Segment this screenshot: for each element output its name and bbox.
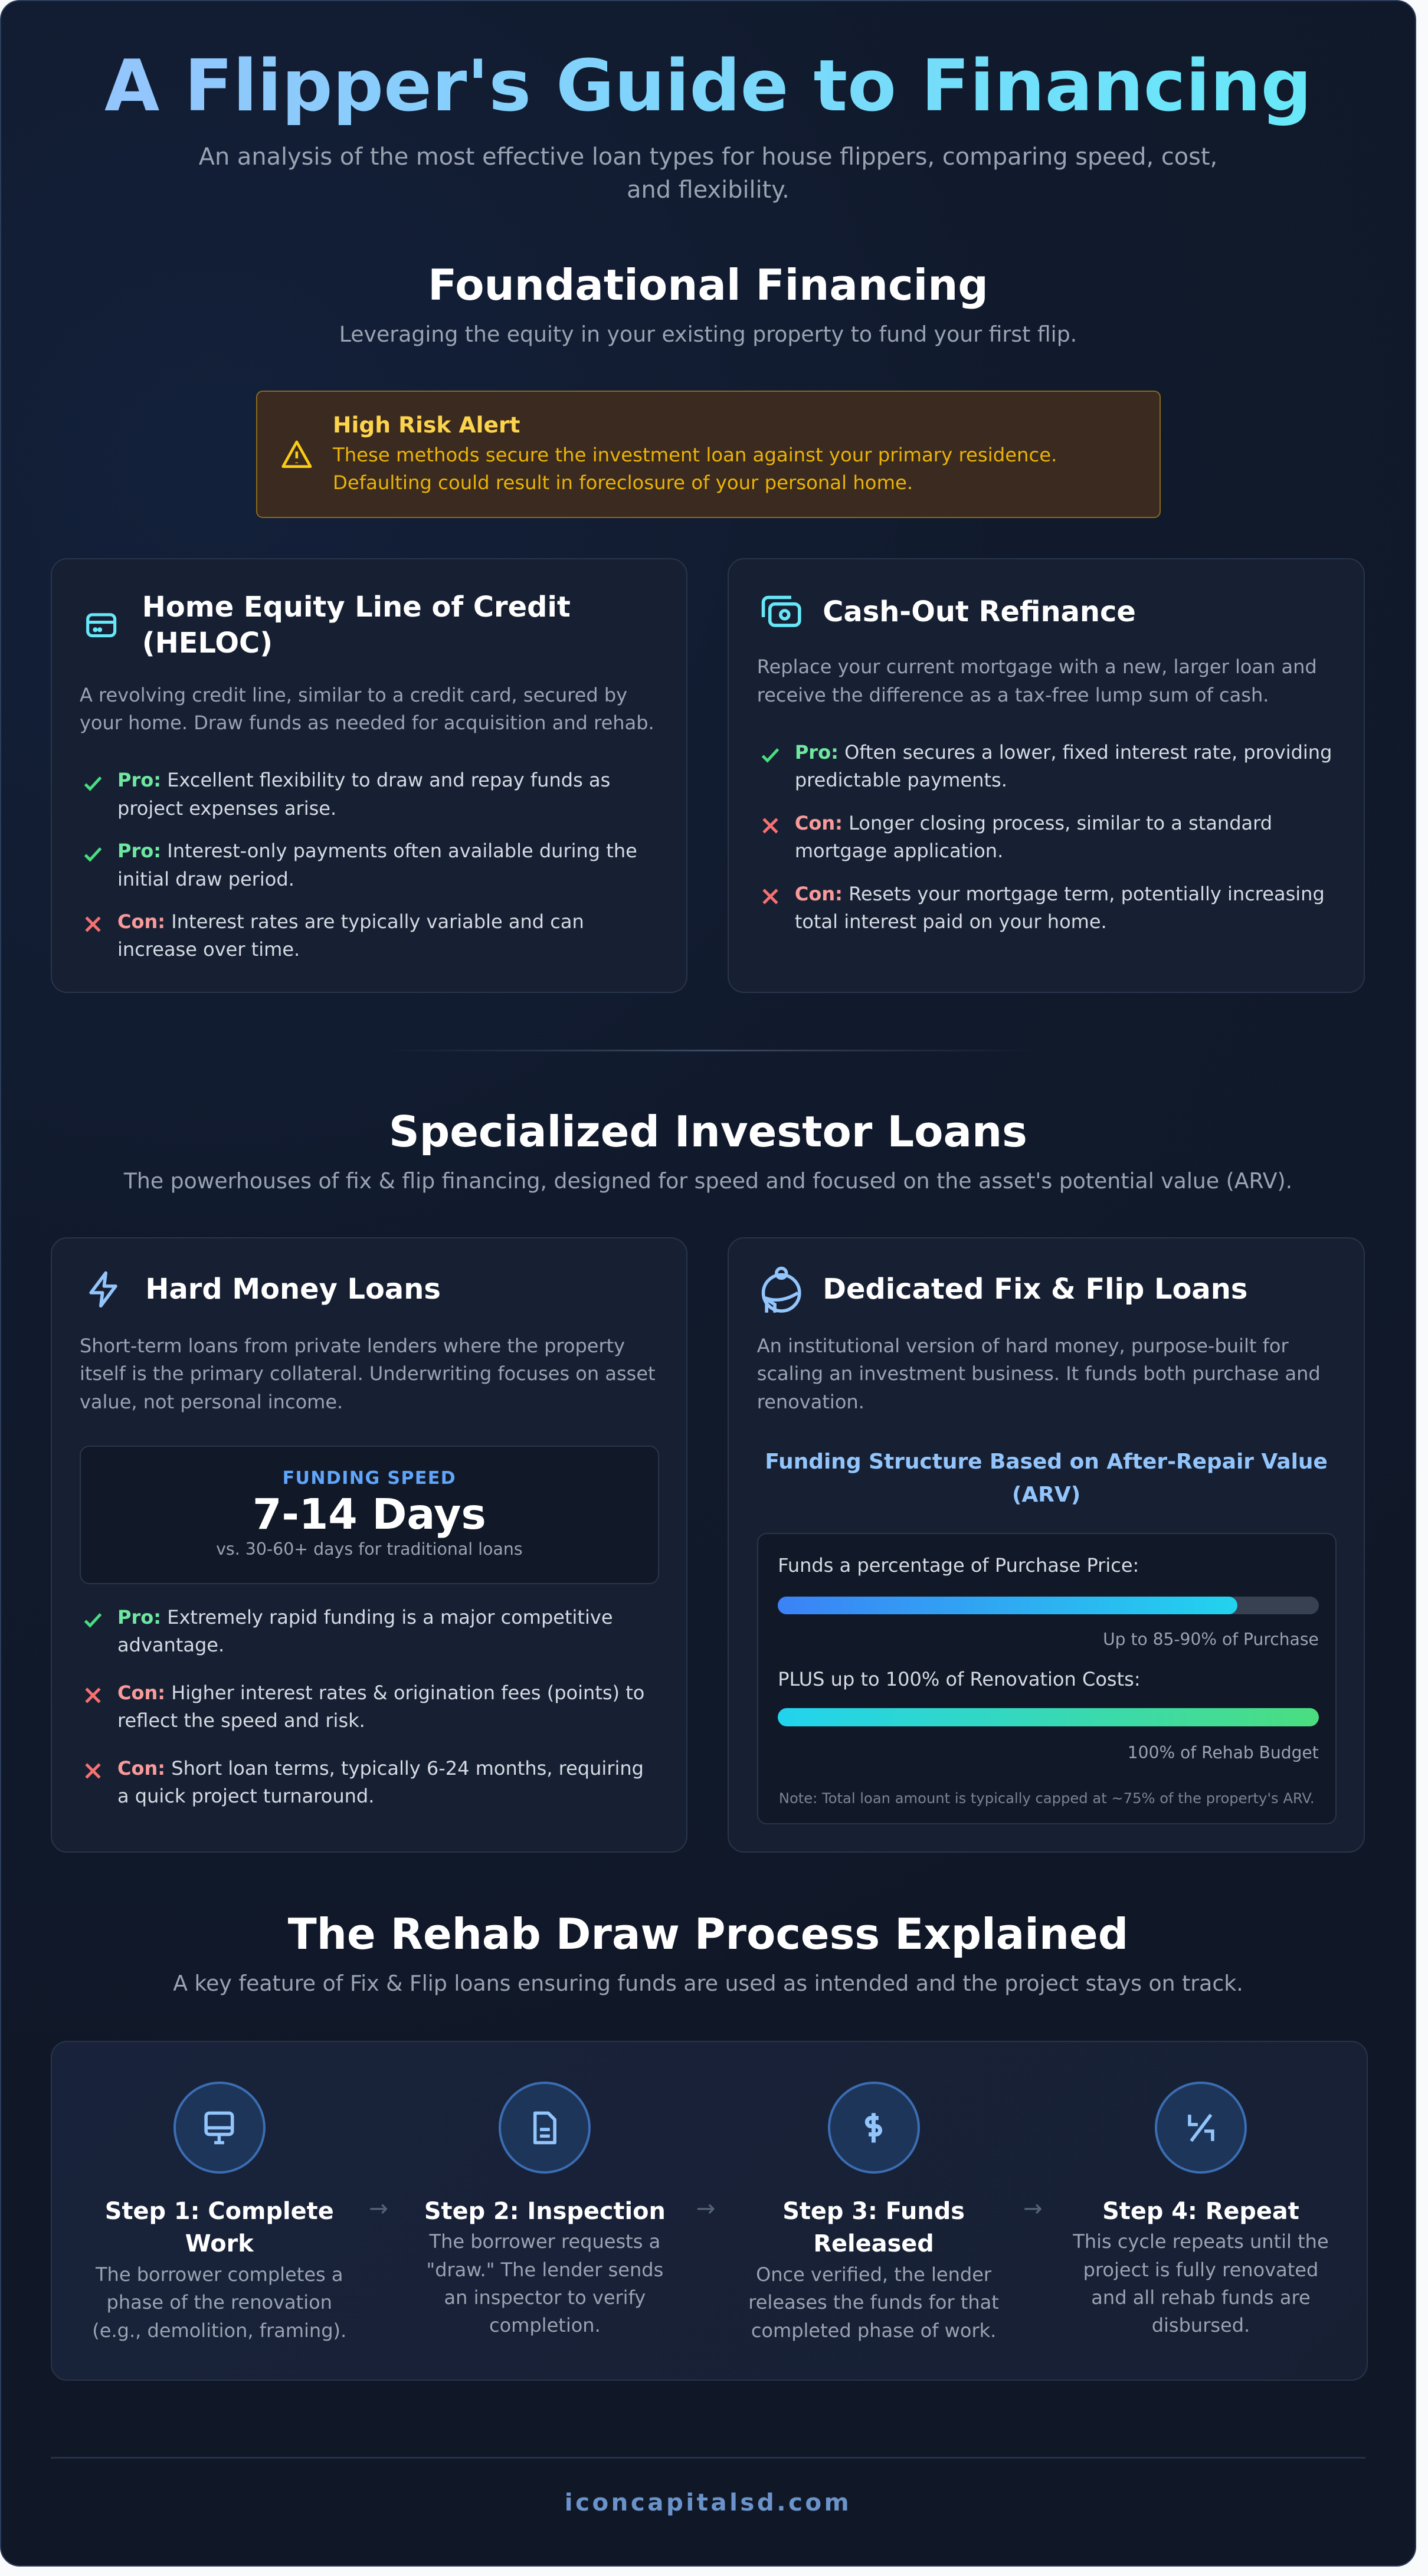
- panel: Dedicated Fix & Flip Loans: [728, 1237, 1365, 1853]
- step 4: Step 4: Repeat: [1102, 2197, 1299, 2224]
- funding speed box: 7-14 Days: [253, 1490, 486, 1539]
- title: A Flipper's Guide to Financing: [104, 45, 1312, 127]
- step 2: The borrower requests a "draw." The lender sends an inspector to verify completion.: [426, 2230, 663, 2336]
- title: Dedicated Fix & Flip Loans: [823, 1273, 1247, 1306]
- heading: Rehab Draw Process: The Rehab Draw Process Explained: [288, 1909, 1128, 1959]
- description: Replace your current mortgage with a new, larger loan and receive the difference as a tax-free lump sum of cash.: [757, 656, 1317, 706]
- icon: document: [499, 2082, 591, 2174]
- panel: process steps: [51, 2041, 1368, 2381]
- title: Home Equity Line of Credit (HELOC): [142, 591, 571, 660]
- funding speed box: [80, 1446, 659, 1584]
- section subtitle: The powerhouses of fix & flip financing, designed for speed and focused on the asset's potential value (ARV).: [124, 1168, 1292, 1194]
- pro 2: Pro: Interest-only payments often available during the initial draw period.: [117, 840, 637, 890]
- bar chart: funding structure: PLUS up to 100% of Renovation Costs:: [778, 1668, 1141, 1690]
- heading: Foundational Financing: Foundational Financing: [428, 260, 988, 310]
- alert text: These methods secure the investment loan against your primary residence. Defaulting could result in foreclosure of your personal home.: [333, 444, 1057, 494]
- bar: renovation: [778, 1708, 1319, 1726]
- panel: Hard Money Loans: [51, 1237, 687, 1853]
- alert text: [333, 412, 1057, 494]
- pro: Pro: Often secures a lower, fixed interest rate, providing predictable payments.: [795, 741, 1332, 791]
- step 4: [1061, 2082, 1341, 2361]
- pro 1: Pro: Excellent flexibility to draw and repay funds as project expenses arise.: [117, 769, 610, 820]
- step 2: Step 2: Inspection: [424, 2197, 666, 2224]
- step 4: This cycle repeats until the project is fully renovated and all rehab funds are disbursed.: [1073, 2230, 1329, 2336]
- icon: credit card: [86, 613, 117, 637]
- step 1: [92, 2082, 346, 2342]
- arrow: →: [1023, 2195, 1043, 2222]
- icon: lightning: [89, 1271, 117, 1307]
- con 1: Con: Longer closing process, similar to a standard mortgage application.: [795, 812, 1272, 862]
- step 3: [734, 2082, 1013, 2361]
- note: Note: Total loan amount is typically capped at ~75% of the property's ARV.: [779, 1790, 1315, 1807]
- title: Hard Money Loans: [145, 1273, 441, 1306]
- arrow: →: [369, 2195, 388, 2222]
- subheading: funding structure: Funding Structure Based on After-Repair Value (ARV): [765, 1450, 1328, 1507]
- step 1: The borrower completes a phase of the renovation (e.g., demolition, framing).: [92, 2263, 346, 2342]
- description: An institutional version of hard money, purpose-built for scaling an investment business. It funds both purchase and renovation.: [757, 1335, 1321, 1413]
- bar chart: funding structure: Up to 85-90% of Purchase: [1103, 1630, 1319, 1649]
- bar chart: funding structure: [757, 1533, 1337, 1824]
- panel: HELOC: [51, 558, 687, 993]
- bar: purchase: [778, 1597, 1319, 1614]
- icon: person: [761, 1266, 801, 1313]
- alert: high risk: [256, 391, 1161, 518]
- icon: dollar: [828, 2082, 920, 2174]
- arrow: →: [696, 2195, 715, 2222]
- con 1: Con: Interest rates are typically variable and can increase over time.: [117, 910, 584, 961]
- con 2: Con: Short loan terms, typically 6-24 months, requiring a quick project turnaround.: [117, 1757, 644, 1807]
- con 1: Con: Higher interest rates & origination fees (points) to reflect the speed and risk.: [117, 1682, 644, 1732]
- alert text: High Risk Alert: [333, 412, 520, 438]
- section subtitle: Leveraging the equity in your existing property to fund your first flip.: [339, 322, 1077, 347]
- step 2: [405, 2082, 684, 2361]
- description: Short-term loans from private lenders where the property itself is the primary collateral. Underwriting focuses on asset value, not personal income.: [80, 1335, 656, 1413]
- section subtitle: A key feature of Fix & Flip loans ensuring funds are used as intended and the project stays on track.: [173, 1971, 1243, 1996]
- icon: monitor: [173, 2082, 266, 2174]
- pro: Pro: Extremely rapid funding is a major competitive advantage.: [117, 1606, 613, 1656]
- icon: warning: [281, 440, 312, 468]
- bar chart: funding structure: 100% of Rehab Budget: [1128, 1743, 1319, 1762]
- footer: website: iconcapitalsd.com: [565, 2489, 851, 2516]
- icon: repeat: [1155, 2082, 1247, 2174]
- step 3: Step 3: Funds Released: [782, 2197, 965, 2257]
- step 1: Step 1: Complete Work: [105, 2197, 334, 2257]
- con 2: Con: Resets your mortgage term, potentially increasing total interest paid on your home.: [795, 883, 1325, 933]
- heading: Specialized Investor Loans: Specialized Investor Loans: [389, 1107, 1027, 1156]
- funding speed box: FUNDING SPEED: [283, 1468, 456, 1489]
- description: A revolving credit line, similar to a credit card, secured by your home. Draw funds as needed for acquisition and rehab.: [80, 684, 654, 734]
- step 3: Once verified, the lender releases the funds for that completed phase of work.: [748, 2263, 999, 2342]
- panel: Cash-Out Refinance: [728, 558, 1365, 993]
- title: Cash-Out Refinance: [823, 596, 1136, 628]
- subtitle: An analysis of the most effective loan types for house flippers, comparing speed, cost, and flexibility.: [199, 143, 1217, 204]
- icon: cash: [761, 596, 801, 627]
- bar chart: funding structure: Funds a percentage of Purchase Price:: [778, 1554, 1139, 1577]
- funding speed box: vs. 30-60+ days for traditional loans: [216, 1539, 523, 1559]
